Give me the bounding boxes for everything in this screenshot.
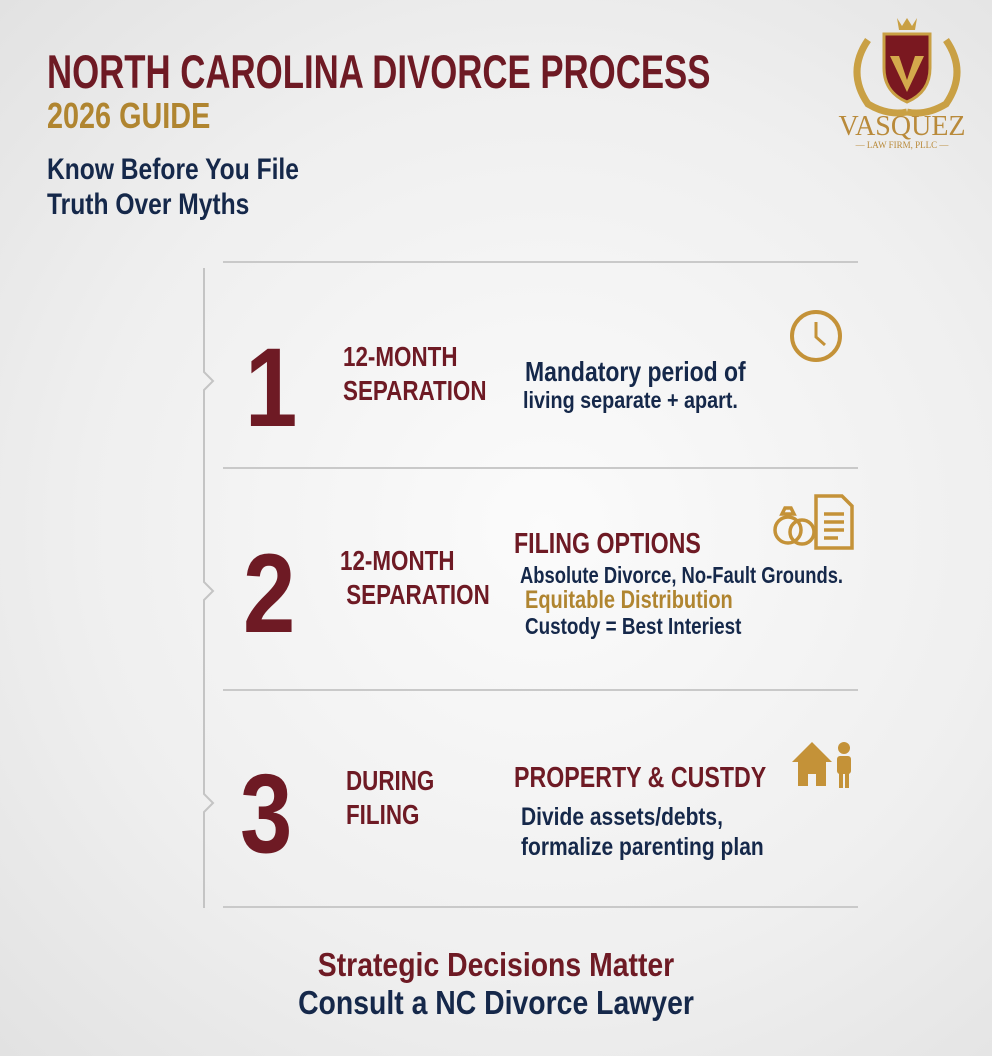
- step 3: [240, 742, 851, 876]
- tagline: Know Before You File: [47, 153, 299, 186]
- logo: [838, 18, 966, 150]
- step 2: 12-MONTH: [340, 545, 454, 576]
- step 3: PROPERTY & CUSTDY: [514, 762, 766, 794]
- icon: clock: [790, 310, 842, 362]
- footer call to action: Consult a NC Divorce Lawyer: [298, 984, 694, 1021]
- step 1: living separate + apart.: [523, 387, 738, 413]
- step 2: FILING OPTIONS: [514, 528, 701, 560]
- step 3: 3: [240, 751, 292, 876]
- step 3: formalize parenting plan: [521, 833, 764, 861]
- tagline: [47, 153, 299, 221]
- step 2: Absolute Divorce, No-Fault Grounds.: [520, 562, 843, 588]
- step 2: SEPARATION: [346, 579, 490, 610]
- step 3: FILING: [346, 799, 419, 830]
- title: NORTH CAROLINA DIVORCE PROCESS: [47, 45, 710, 98]
- logo: — LAW FIRM, PLLC —: [855, 140, 949, 150]
- icon: house and person: [792, 742, 851, 788]
- step 1: 1: [245, 325, 297, 450]
- tagline: Truth Over Myths: [47, 188, 249, 221]
- step 1: [245, 310, 842, 450]
- footer call to action: [298, 946, 694, 1021]
- icon: rings and document: [773, 494, 854, 550]
- step 2: 2: [243, 531, 295, 656]
- step 2: Custody = Best Interiest: [525, 613, 741, 639]
- timeline line: [203, 268, 214, 908]
- step 2: Equitable Distribution: [525, 586, 733, 614]
- footer call to action: Strategic Decisions Matter: [318, 946, 674, 983]
- step 3: Divide assets/debts,: [521, 803, 723, 831]
- subtitle year: 2026 GUIDE: [47, 95, 210, 136]
- step 1: SEPARATION: [343, 375, 487, 406]
- step 1: 12-MONTH: [343, 341, 458, 372]
- step 3: DURING: [346, 765, 434, 796]
- step 2: [243, 494, 854, 656]
- logo: VASQUEZ: [838, 111, 966, 142]
- step 1: Mandatory period of: [525, 356, 746, 387]
